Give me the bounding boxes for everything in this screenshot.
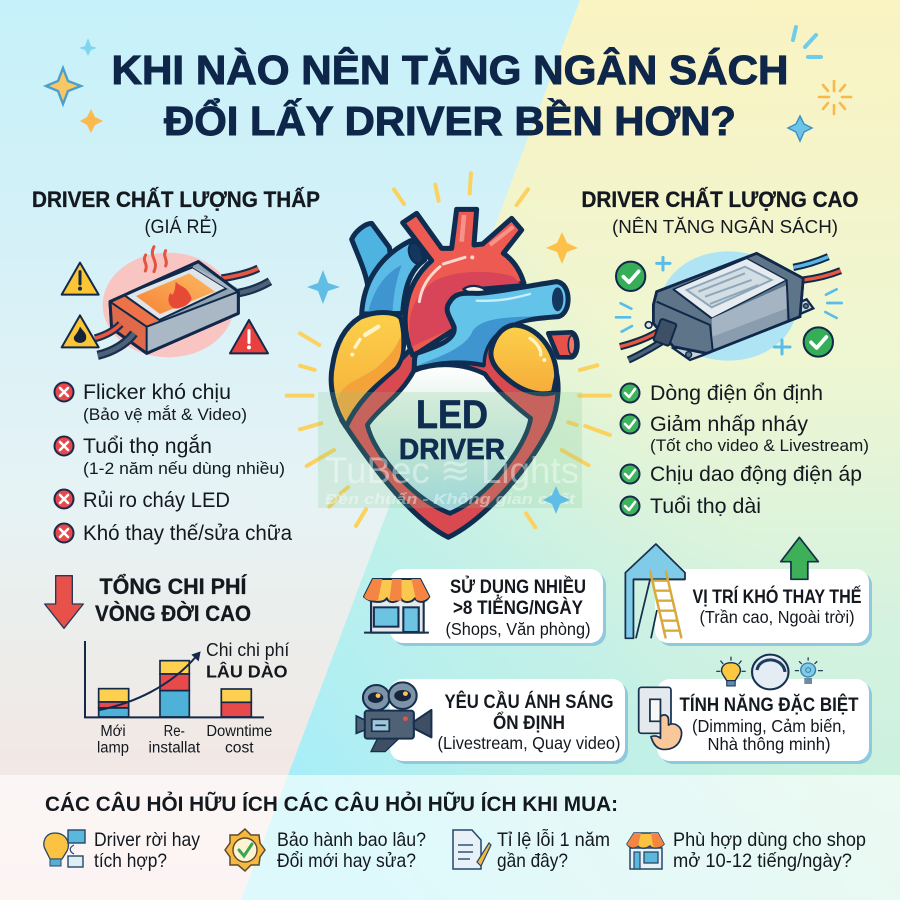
heart label [399,393,505,466]
icon: yellow bulb [716,657,746,686]
card text: >8 TIẾNG/NGÀY [453,597,583,619]
axis labels: lamp [97,740,129,757]
axis labels [97,723,272,757]
heading: buying questions: CÁC CÂU HỎI HỮU ÍCH CÁC CÂU HỎI HỮU ÍCH KHI MUA: [45,792,618,816]
card text: SỬ DỤNG NHIỀU [450,576,586,598]
card: special features [639,655,872,764]
sparkles around heart [307,232,578,304]
question: shop suitability: Phù hợp dùng cho shop [673,829,866,851]
panel: buying questions [44,792,866,872]
list: high-quality benefits: Tuổi thọ dài [650,494,761,518]
blue vena cava [352,223,425,314]
card text: TÍNH NĂNG ĐẶC BIỆT [680,694,859,716]
question: failure rate: gần đây? [497,850,568,872]
red aorta [403,209,524,355]
card text: VỊ TRÍ KHÓ THAY THẾ [692,586,862,608]
icon: green up arrow [781,537,818,579]
right yellow atrium [491,325,557,394]
icon: dimmer dial [752,655,789,689]
chart axes [85,641,264,717]
panel: high-quality driver [582,187,869,518]
small red vessel [548,332,577,357]
icon: smart bulb [795,657,823,684]
card text: (Trần cao, Ngoài trời) [700,607,854,627]
list: high-quality benefits: Dòng điện ổn định [650,381,823,405]
axis labels: installat [148,740,201,757]
illustration: heart [331,209,577,537]
heading: low-quality driver [32,187,320,238]
axis labels: cost [225,740,254,757]
card: hard-to-replace location [625,537,872,646]
question: shop suitability: mở 10-12 tiếng/ngày? [673,850,852,872]
card: stable light [356,679,628,764]
card text [680,694,859,754]
heading: low-quality driver: (GIÁ RẺ) [144,216,218,238]
bar: downtime [221,689,251,717]
icon: fire warning triangle [62,315,99,347]
trend arrow [99,651,201,710]
decorative sparkles, right of title [788,27,851,141]
question: warranty [225,829,426,872]
heading: high-quality driver [582,187,858,237]
title: KHI NÀO NÊN TĂNG NGÂN SÁCH [112,47,788,93]
list: low-quality drawbacks: (1-2 năm nếu dùng nhiều) [83,460,285,478]
heading: high-quality driver: DRIVER CHẤT LƯỢNG CAO [582,187,858,212]
card text: Nhà thông minh) [708,734,830,754]
decorative sparkles, left of title [46,38,103,133]
decorative rays around heart [287,173,610,527]
icon: danger triangle [230,320,268,353]
axis labels: Mới [100,723,126,740]
icon: red down arrow [45,576,83,628]
icon: check bullets [620,384,640,516]
card text: YÊU CẦU ÁNH SÁNG [444,691,614,713]
panel: lifecycle cost [45,574,290,757]
icon: gear badge [225,829,265,871]
heading: high-quality driver: (NÊN TĂNG NGÂN SÁCH) [612,217,838,237]
inner shield [367,365,531,513]
icon: shop [364,579,429,633]
card background [390,679,628,764]
title: ĐỔI LẤY DRIVER BỀN HƠN? [164,97,736,144]
bar: new lamp [99,689,129,717]
list: low-quality drawbacks: Khó thay thế/sửa chữa [83,521,292,545]
list: high-quality benefits: (Tốt cho video & Livestream) [650,437,869,455]
icon: cross bullets [54,382,74,542]
card: heavy usage [364,569,606,646]
icon: warning triangle [62,263,99,295]
list: low-quality drawbacks [54,380,292,545]
icon: small shop [627,833,664,869]
chart callout: LÂU DÀO [206,661,288,681]
watermark: TuBec ≋ Lights [325,450,579,491]
chart callout [206,639,290,681]
icon: green checks [616,262,833,357]
heading: lifecycle cost: TỔNG CHI PHÍ [100,574,247,599]
list: low-quality drawbacks: (Bảo vệ mắt & Video) [83,405,247,424]
heading: low-quality driver: DRIVER CHẤT LƯỢNG THẤP [32,187,320,212]
watermark: Đèn chuẩn - Không gian chất [325,491,576,508]
card text: (Dimming, Cảm biến, [692,716,846,736]
list: low-quality drawbacks: Tuổi thọ ngắn [83,433,212,458]
panel: low-quality driver [32,187,320,545]
card text: ỔN ĐỊNH [493,712,565,734]
left yellow atrium [331,313,404,427]
card text: (Shops, Văn phòng) [446,619,590,639]
card background [655,569,872,646]
list: high-quality benefits: Giảm nhấp nháy [650,412,808,436]
heart label: DRIVER [399,434,505,466]
blue sparkle over watermark [543,486,570,514]
list: high-quality benefits: Chịu dao động điện áp [650,462,862,486]
heart body [342,337,558,537]
card background [657,679,872,764]
axis labels: Re- [164,723,185,740]
bar: re-installation [160,661,189,717]
icon: film camera [356,682,431,752]
blue pulmonary artery [414,282,568,369]
icon: house with ladder [625,544,685,638]
card text [446,576,590,639]
question: shop suitability [627,829,866,872]
heading: lifecycle cost [95,574,251,626]
card text: (Livestream, Quay video) [438,733,620,753]
question: warranty: Bảo hành bao lâu? [277,829,426,851]
icon: durable driver [620,251,841,361]
bar chart: cost breakdown [85,639,290,757]
question: warranty: Đổi mới hay sửa? [277,850,416,872]
icon: checklist and pencil [453,830,491,869]
icon: overheating cheap driver [95,247,270,357]
axis labels: Downtime [206,723,272,740]
title [112,47,788,144]
icon: blue plus and sparks [616,257,842,354]
heading: lifecycle cost: VÒNG ĐỜI CAO [95,601,251,626]
watermark [318,392,582,508]
list: low-quality drawbacks: Rủi ro cháy LED [83,488,230,512]
list: low-quality drawbacks: Flicker khó chịu [83,380,231,404]
icon: wall switch and hand [639,687,682,749]
heart label: LED [416,393,488,437]
card background [390,569,606,646]
question: separate or integrated driver [44,829,200,872]
question: separate or integrated driver: Driver rời hay [94,829,200,851]
card text [692,586,862,627]
question: separate or integrated driver: tích hợp? [94,850,167,872]
question: failure rate: Tỉ lệ lỗi 1 năm [497,828,610,851]
white hole [463,286,487,296]
icon: bulb and modules [44,830,85,867]
question: failure rate [453,828,610,872]
chart callout: Chi chi phí [206,639,290,660]
list: high-quality benefits [620,381,869,518]
card text [438,691,620,753]
